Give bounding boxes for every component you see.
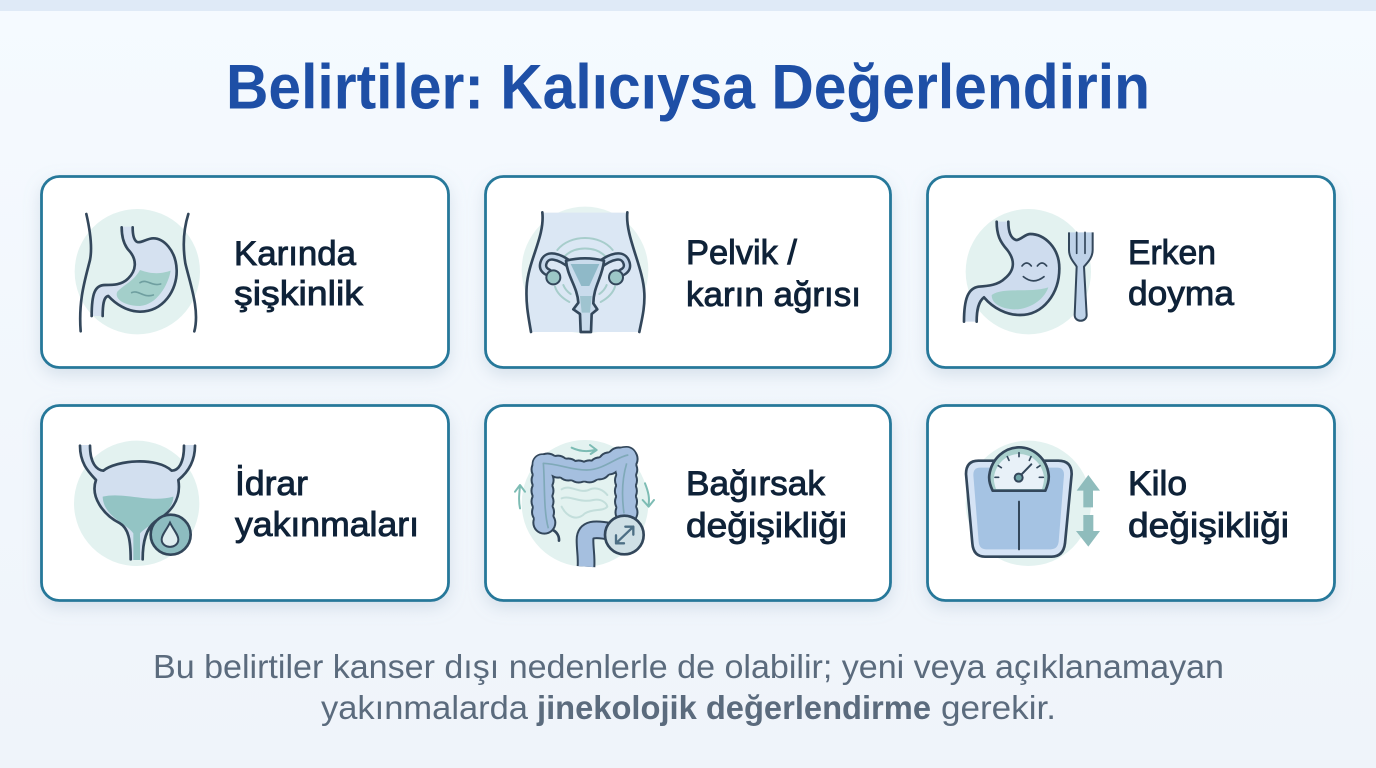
footer note — [153, 648, 1224, 726]
label — [686, 465, 847, 545]
panel: İdrar yakınmaları — [42, 406, 448, 600]
footer note: jinekolojik değerlendirme — [536, 689, 931, 726]
label: Pelvik / — [686, 234, 798, 272]
label: değişikliği — [686, 507, 847, 545]
footer note: gerekir. — [941, 689, 1056, 726]
label: Bağırsak — [686, 465, 826, 503]
label: doyma — [1128, 275, 1234, 313]
icon: pelvis and uterus — [522, 207, 648, 333]
icon: colon — [515, 440, 654, 567]
label — [686, 234, 861, 314]
label: Kilo — [1128, 465, 1187, 503]
icon: weighing scale — [966, 441, 1100, 566]
label — [1128, 234, 1234, 313]
label: şişkinlik — [234, 275, 364, 313]
panel: Kilo değişikliği — [928, 406, 1334, 600]
label — [234, 235, 364, 313]
label — [235, 465, 419, 544]
label: değişikliği — [1128, 507, 1289, 545]
footer note: Bu belirtiler kanser dışı nedenlerle de olabilir; yeni veya açıklanamayan — [153, 648, 1224, 685]
panel: Pelvik / karın ağrısı — [486, 176, 890, 368]
label: İdrar — [235, 465, 308, 503]
title: Belirtiler: Kalıcıysa Değerlendirin — [226, 52, 1150, 122]
label: karın ağrısı — [686, 276, 861, 314]
panel: Karında şişkinlik — [42, 176, 448, 368]
icon: stomach and fork — [964, 209, 1093, 334]
label — [1128, 465, 1289, 545]
icon: bloated stomach — [75, 209, 200, 334]
footer note: yakınmalarda — [321, 689, 529, 726]
label: Erken — [1128, 234, 1216, 272]
label: yakınmaları — [235, 506, 419, 544]
panel: Erken doyma — [928, 176, 1334, 368]
icon: bladder with drop — [74, 441, 199, 566]
panel: Bağırsak değişikliği — [486, 406, 890, 600]
label: Karında — [234, 235, 356, 273]
